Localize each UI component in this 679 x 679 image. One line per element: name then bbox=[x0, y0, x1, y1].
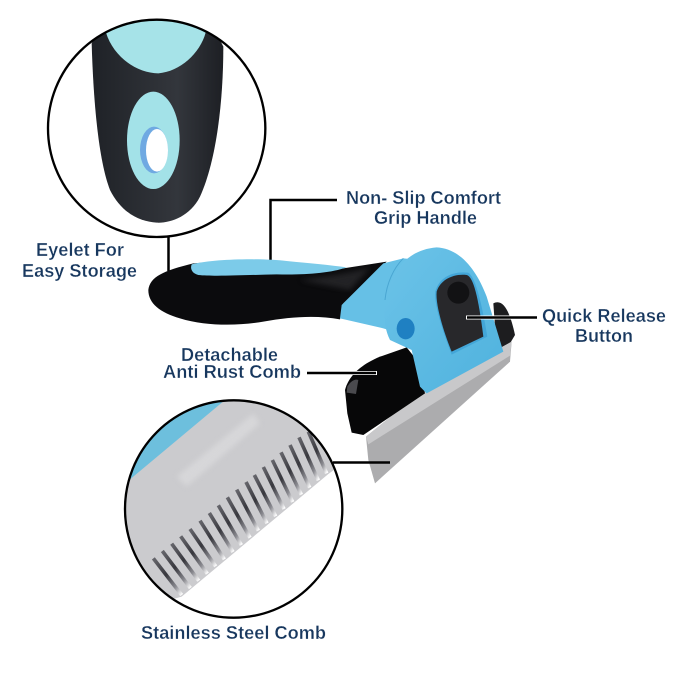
teal inlay bbox=[106, 18, 206, 73]
black comb holder bbox=[345, 347, 425, 435]
steel blade bbox=[366, 342, 512, 483]
connector: steel comb bbox=[333, 461, 390, 464]
label: detachable comb bbox=[163, 345, 301, 382]
label: quick release: Button bbox=[575, 326, 633, 346]
label: grip handle: Non- Slip Comfort bbox=[346, 188, 501, 208]
panel: eyelet close-up bbox=[48, 13, 265, 237]
label: grip handle: Grip Handle bbox=[374, 208, 477, 228]
neck crease bbox=[385, 258, 403, 300]
connector: grip bbox=[270, 200, 337, 270]
light sheen bbox=[180, 418, 256, 483]
connector: release bbox=[466, 316, 537, 320]
panel: stainless steel comb close-up bbox=[120, 400, 343, 618]
release button bbox=[437, 275, 483, 352]
window rim bbox=[435, 272, 487, 355]
blue neck bbox=[340, 258, 420, 340]
connector: eyelet bbox=[167, 237, 170, 271]
handle bbox=[148, 259, 387, 325]
grip inlay bbox=[191, 259, 347, 276]
comb teeth bbox=[153, 432, 327, 595]
eyelet oval bbox=[127, 92, 180, 189]
label: stainless steel comb: Stainless Steel Comb bbox=[141, 623, 326, 643]
pivot hole bbox=[397, 318, 415, 339]
head bbox=[340, 247, 515, 483]
steel surface bbox=[120, 400, 343, 600]
label: eyelet: Easy Storage bbox=[22, 261, 137, 281]
blade highlight band bbox=[366, 342, 512, 444]
label: eyelet: Eyelet For bbox=[36, 240, 124, 260]
label: grip handle bbox=[346, 188, 501, 228]
label: detachable comb: Detachable bbox=[181, 345, 278, 365]
label: eyelet bbox=[22, 240, 137, 281]
eyelet hole bbox=[146, 129, 168, 172]
label: detachable comb: Anti Rust Comb bbox=[163, 362, 301, 382]
blue body corner bbox=[130, 402, 222, 479]
label: quick release bbox=[542, 306, 666, 346]
button knob bbox=[447, 282, 469, 304]
connector: comb bbox=[307, 371, 377, 375]
eyelet hole shadow bbox=[140, 127, 168, 173]
circle border bbox=[48, 20, 265, 237]
label: quick release: Quick Release bbox=[542, 306, 666, 326]
rear black housing bbox=[493, 302, 515, 350]
handle end bbox=[92, 13, 223, 223]
blue head bbox=[384, 247, 503, 393]
product: deshedding tool bbox=[148, 247, 515, 483]
holder specular bbox=[347, 380, 358, 394]
circle border bbox=[125, 400, 342, 618]
